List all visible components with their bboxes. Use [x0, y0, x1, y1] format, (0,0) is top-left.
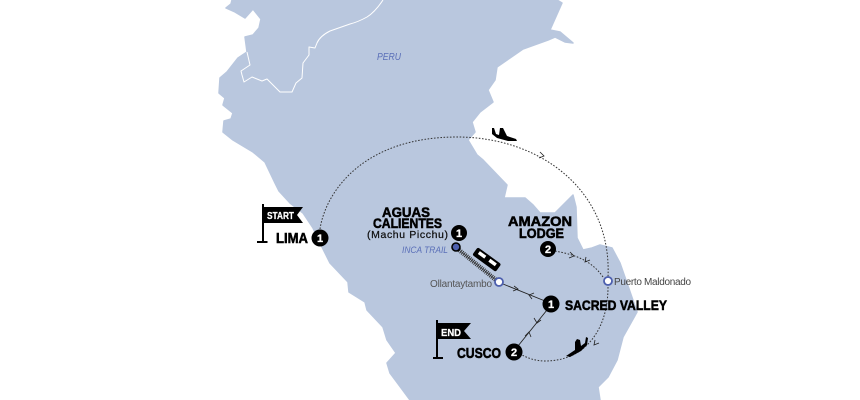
label: Inca Trail: INCA TRAIL [402, 245, 448, 256]
route: Sacred Valley to Cusco [518, 310, 547, 346]
flight arc: Puerto Maldonado to Cusco [522, 287, 608, 361]
label: Aguas Calientes [367, 204, 467, 241]
label: Cusco: CUSCO [457, 346, 501, 362]
route: Puerto Maldonado to Amazon Lodge [555, 251, 603, 277]
icon: train [472, 247, 501, 272]
route: Ollantaytambo to Sacred Valley [503, 284, 545, 301]
label: Aguas Calientes: (Machu Picchu) [367, 229, 448, 241]
label: Sacred Valley: SACRED VALLEY [565, 297, 668, 313]
border line [241, 0, 383, 92]
label: Lima: LIMA [276, 231, 308, 247]
label: Amazon Lodge: 2 [545, 244, 551, 256]
label: Cusco: 2 [511, 347, 517, 359]
stop: Puerto Maldonado marker [604, 277, 612, 285]
stop: Ollantaytambo marker [495, 278, 503, 286]
label: Sacred Valley: 1 [548, 299, 554, 311]
label: Sacred Valley [542, 296, 668, 313]
flight arc: Lima to Puerto Maldonado [320, 137, 608, 277]
label: Aguas Calientes: AGUAS [382, 204, 430, 220]
label: Amazon Lodge: LODGE [519, 225, 564, 241]
rail track [459, 250, 496, 280]
label: Aguas Calientes: 1 [456, 228, 462, 240]
flag: end [433, 320, 471, 359]
stop: Aguas Calientes marker [452, 243, 460, 251]
icon: plane north [492, 128, 517, 141]
label: Cusco [457, 344, 522, 362]
icon: plane south [566, 337, 588, 357]
route arrows [513, 152, 599, 345]
land mass [219, 0, 637, 400]
label: Amazon Lodge: AMAZON [508, 213, 572, 229]
label: Aguas Calientes: CALIENTES [373, 215, 442, 231]
label: Lima: 1 [317, 233, 323, 245]
label: Puerto Maldonado: Puerto Maldonado [614, 277, 691, 288]
label: Peru: PERU [377, 52, 402, 63]
flag: end: END [441, 328, 461, 339]
label: Ollantaytambo: Ollantaytambo [430, 279, 492, 290]
flag: start [257, 204, 303, 243]
label: Amazon Lodge [508, 213, 572, 257]
flag: start: START [267, 211, 294, 222]
label: Lima [276, 230, 328, 247]
